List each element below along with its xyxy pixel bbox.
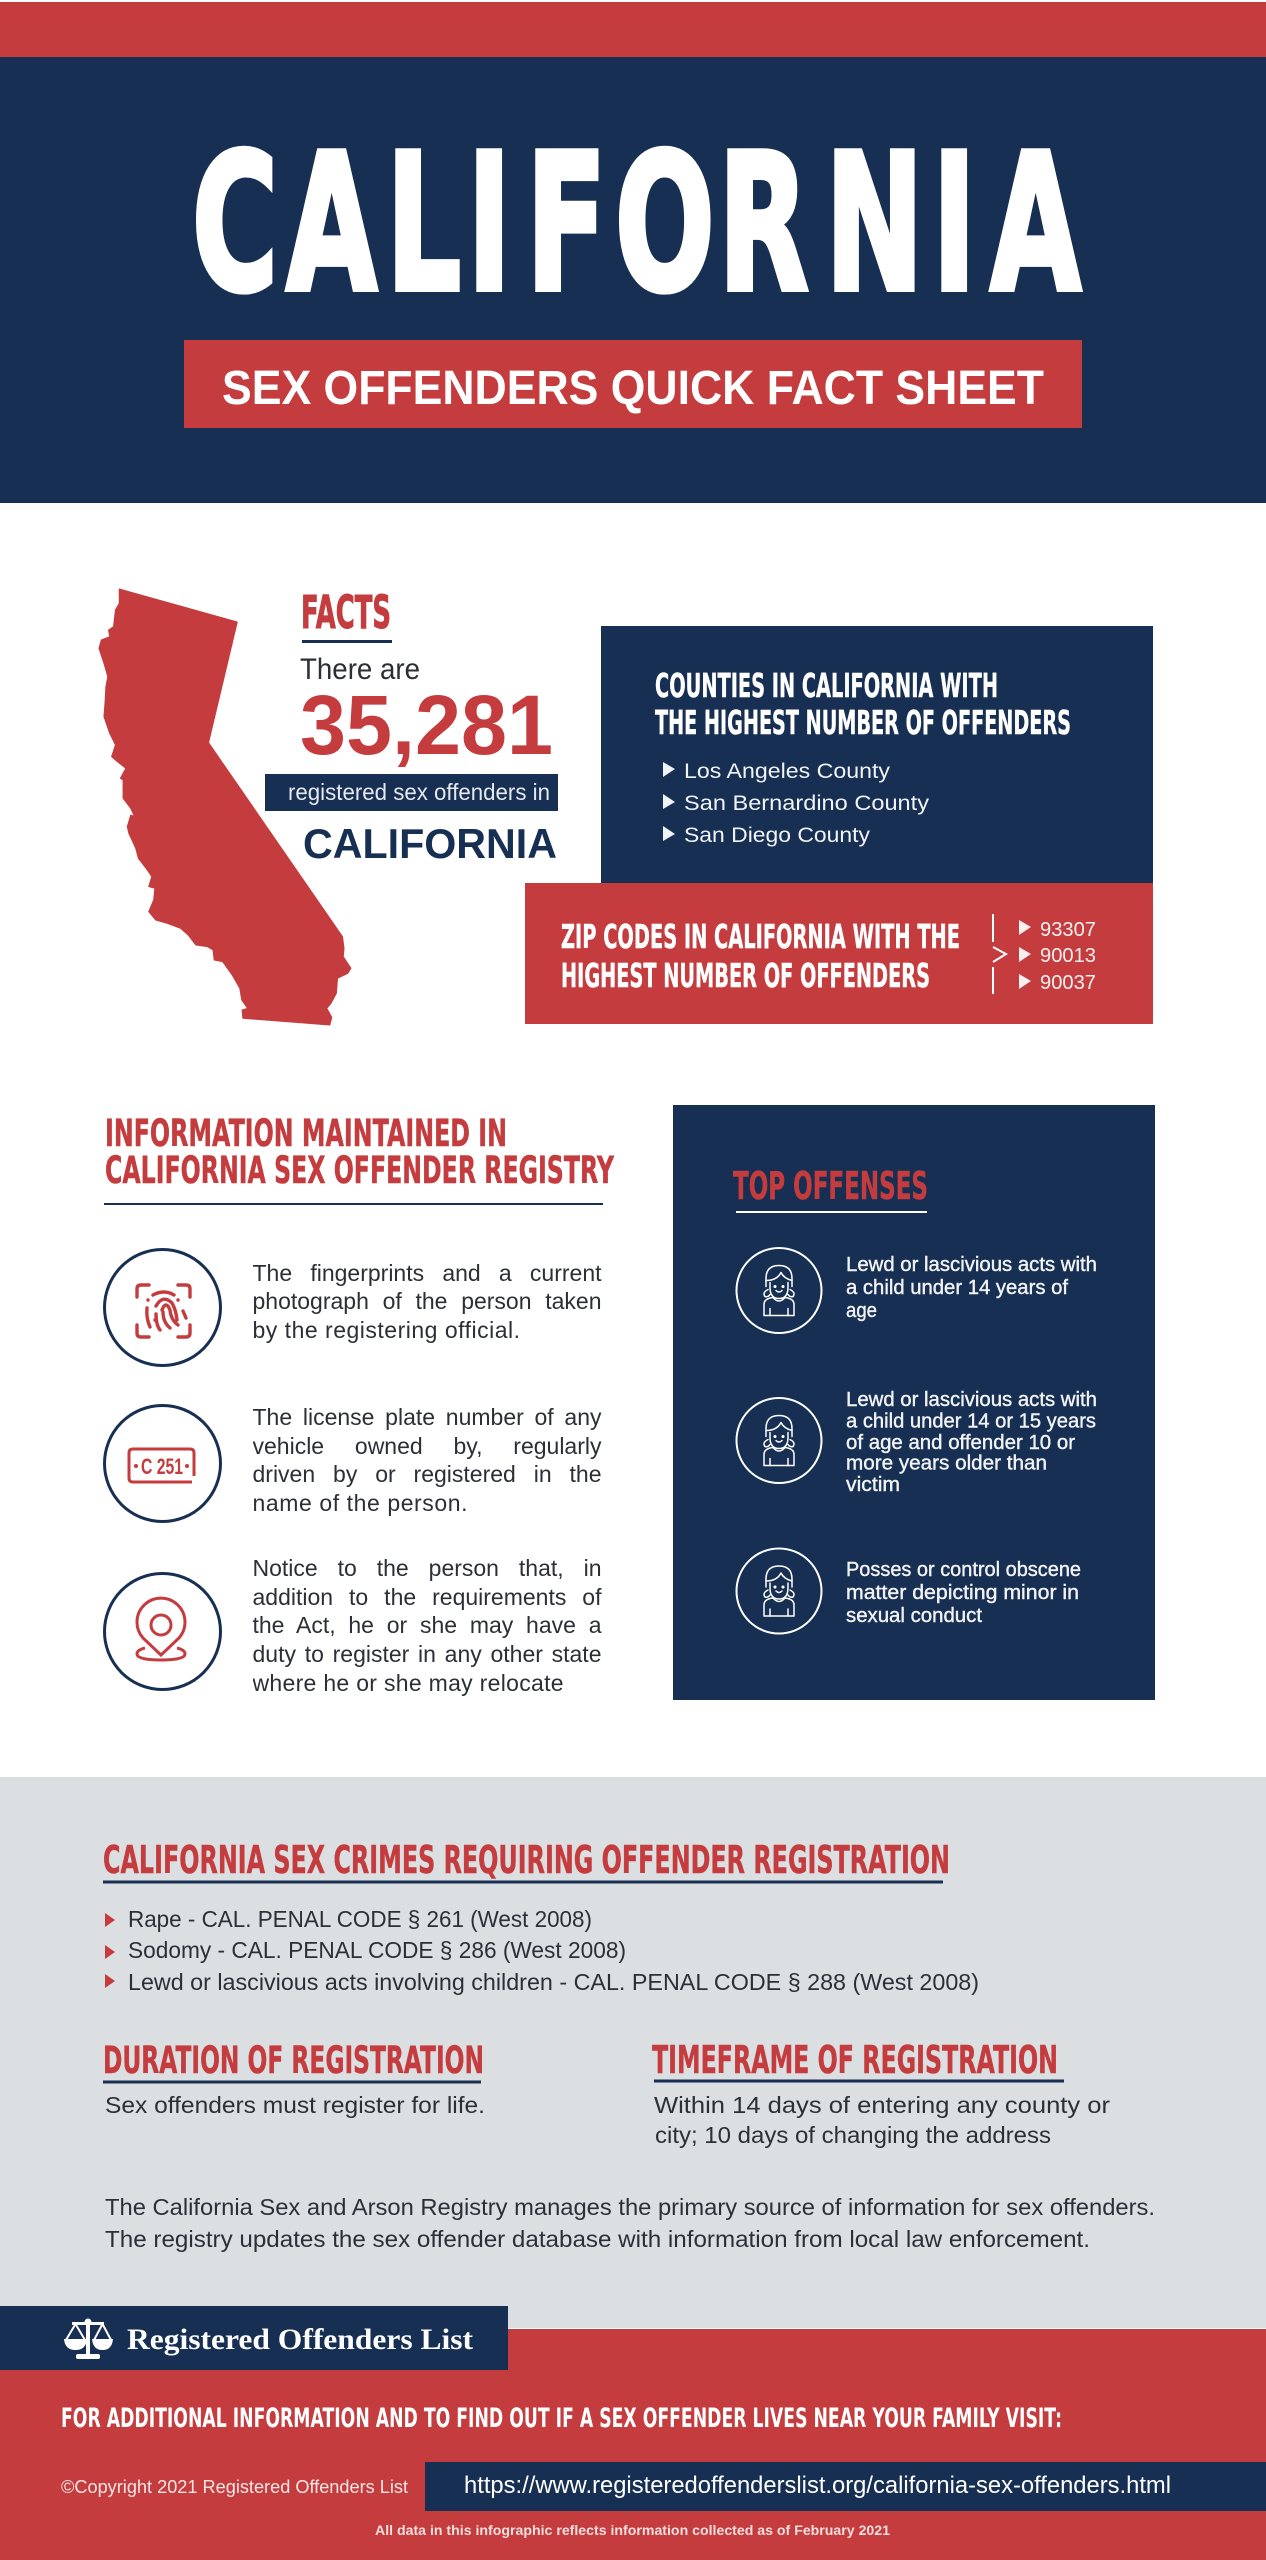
subtitle bar <box>184 340 1082 428</box>
url bar <box>425 2462 1266 2511</box>
facts heading <box>301 586 392 643</box>
crimes list: Lewd or lascivious acts involving children - CAL. PENAL CODE § 288 (West 2008) <box>128 1969 979 1995</box>
panel: counties <box>601 626 1153 883</box>
offense 2 <box>736 1389 1097 1496</box>
registry paragraph <box>105 2194 1155 2252</box>
big number: 35,281 <box>300 678 553 772</box>
license plate text: The license plate number of any <box>252 1404 602 1430</box>
icon: California map <box>99 589 351 1025</box>
data note: All data in this infographic reflects information collected as of February 2021 <box>375 2522 890 2538</box>
counties list <box>663 760 930 847</box>
copyright: ©Copyright 2021 Registered Offenders List <box>61 2477 408 2497</box>
duration block <box>103 2039 485 2118</box>
offense 1 <box>736 1248 1097 1333</box>
notice text: duty to register in any other state <box>252 1641 602 1667</box>
offense 3 <box>736 1548 1081 1634</box>
timeframe block: city; 10 days of changing the address <box>655 2122 1051 2148</box>
panel: zip codes <box>525 883 1153 1024</box>
bracket arrow <box>993 914 1006 994</box>
offense 1 text <box>846 1254 1097 1322</box>
offense 1 text: a child under 14 years of <box>846 1277 1068 1299</box>
there are: There are <box>300 653 420 686</box>
counties heading <box>655 666 1071 742</box>
crimes list: Rape - CAL. PENAL CODE § 261 (West 2008) <box>128 1906 592 1932</box>
facts block <box>265 586 558 867</box>
registered bar <box>265 774 558 811</box>
timeframe block <box>652 2038 1110 2148</box>
license plate row <box>104 1403 602 1523</box>
icon: child <box>736 1548 822 1634</box>
offense 3 text: sexual conduct <box>846 1605 982 1627</box>
counties list: Los Angeles County <box>684 760 891 783</box>
registry paragraph: The California Sex and Arson Registry manages the primary source of information for sex offenders. <box>105 2194 1155 2220</box>
counties list: San Diego County <box>684 824 871 847</box>
logo bar: Registered Offenders List <box>127 2323 473 2356</box>
icon: license plate <box>104 1406 220 1522</box>
notice text <box>252 1554 602 1704</box>
license plate text: driven by or registered in the <box>252 1461 602 1487</box>
state name: CALIFORNIA <box>303 820 557 867</box>
information heading: INFORMATION MAINTAINED IN <box>105 1112 507 1155</box>
zip heading: HIGHEST NUMBER OF OFFENDERS <box>561 956 930 995</box>
panel: information maintained <box>104 1112 615 1704</box>
timeframe block: Within 14 days of entering any county or <box>654 2092 1110 2118</box>
notice text: Notice to the person that, in <box>252 1555 602 1581</box>
license plate text <box>252 1403 602 1523</box>
offense 3 text <box>846 1559 1081 1627</box>
offense 2 text: victim <box>846 1474 900 1496</box>
icon: child <box>736 1398 822 1483</box>
icon: fingerprint <box>104 1250 220 1366</box>
panel: top offenses <box>673 1105 1155 1700</box>
information heading: CALIFORNIA SEX OFFENDER REGISTRY <box>105 1149 615 1192</box>
panel: sex crimes grey section <box>0 1777 1266 2328</box>
header banner <box>0 2 1266 503</box>
registered bar: registered sex offenders in <box>288 779 550 805</box>
fingerprint text <box>252 1259 602 1349</box>
zip list <box>1019 919 1096 994</box>
license plate text: name of the person. <box>252 1490 468 1516</box>
facts heading: FACTS <box>301 586 391 639</box>
offense 2 text: Lewd or lascivious acts with <box>846 1389 1097 1411</box>
icon: child <box>736 1248 822 1333</box>
notice text: where he or she may relocate <box>252 1670 564 1696</box>
icon: map pin <box>104 1574 220 1690</box>
zip heading: ZIP CODES IN CALIFORNIA WITH THE <box>561 917 960 956</box>
zip list: 90013 <box>1040 945 1096 967</box>
crimes list: Sodomy - CAL. PENAL CODE § 286 (West 2008) <box>128 1937 626 1963</box>
title: CALIFORNIA <box>192 115 1081 335</box>
fingerprint text: The fingerprints and a current <box>252 1260 602 1286</box>
zip list: 93307 <box>1040 919 1096 941</box>
url bar: https://www.registeredoffenderslist.org/california-sex-offenders.html <box>464 2472 1171 2499</box>
offense 3 text: Posses or control obscene <box>846 1559 1081 1581</box>
offense 2 text: of age and offender 10 or <box>846 1432 1075 1454</box>
icon: scales of justice <box>64 2318 113 2359</box>
notice text: the Act, he or she may have a <box>252 1612 602 1638</box>
counties list: San Bernardino County <box>684 792 930 815</box>
logo bar <box>0 2306 508 2370</box>
offense 1 text: age <box>846 1300 877 1322</box>
registry paragraph: The registry updates the sex offender database with information from local law enforcement. <box>105 2226 1090 2252</box>
offense 2 text: a child under 14 or 15 years <box>846 1410 1096 1432</box>
offense 1 text: Lewd or lascivious acts with <box>846 1254 1097 1276</box>
license plate text: vehicle owned by, regularly <box>252 1433 602 1459</box>
information heading <box>104 1112 615 1205</box>
fingerprint text: by the registering official. <box>252 1317 520 1343</box>
fingerprint row <box>104 1250 602 1366</box>
offense 2 text: more years older than <box>846 1453 1047 1475</box>
notice text: addition to the requirements of <box>252 1584 602 1610</box>
fingerprint text: photograph of the person taken <box>252 1288 602 1314</box>
offense 2 text <box>846 1389 1097 1496</box>
panel: footer <box>0 2306 1266 2560</box>
offense 3 text: matter depicting minor in <box>846 1582 1079 1604</box>
crimes list <box>105 1906 979 1995</box>
counties heading: COUNTIES IN CALIFORNIA WITH <box>655 666 998 705</box>
zip list: 90037 <box>1040 972 1096 994</box>
notice row <box>104 1554 602 1704</box>
top offenses heading: TOP OFFENSES <box>733 1164 928 1208</box>
duration block: DURATION OF REGISTRATION <box>103 2039 484 2082</box>
duration block: Sex offenders must register for life. <box>105 2092 485 2118</box>
zip heading <box>561 917 960 995</box>
subtitle bar: SEX OFFENDERS QUICK FACT SHEET <box>222 362 1044 415</box>
icon: license plate: C 251 <box>141 1454 183 1479</box>
